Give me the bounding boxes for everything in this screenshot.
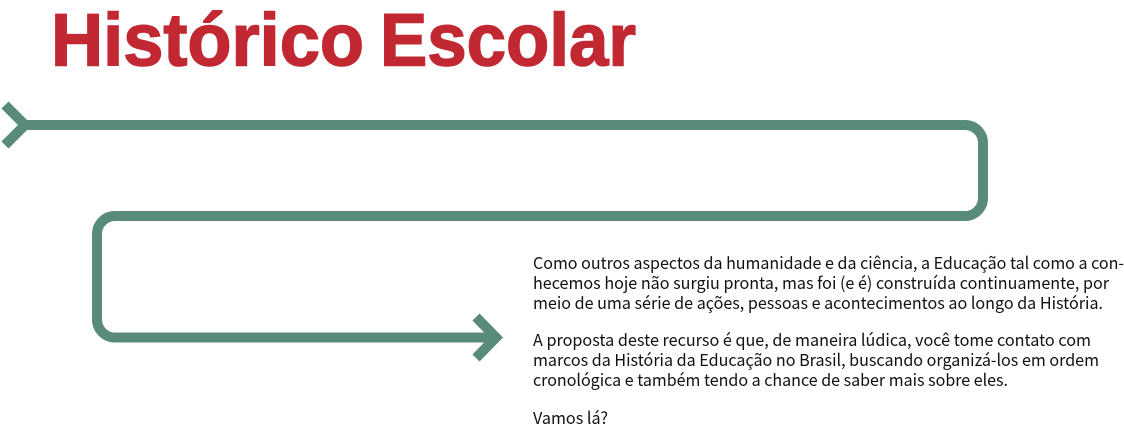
paragraph 1 (533, 250, 1124, 314)
title: Escolar (380, 0, 636, 82)
closing question: Vamos lá? (533, 405, 608, 429)
arrow start chevron (5, 105, 25, 145)
paragraph 1: hecemos hoje não surgiu pronta, mas foi (e é) construída continuamente, por (533, 270, 1110, 294)
title (51, 0, 636, 82)
serpentine arrow path (5, 105, 983, 358)
intro text block (533, 250, 1124, 429)
paragraph 1: meio de uma série de ações, pessoas e acontecimentos ao longo da História. (533, 290, 1103, 314)
arrow head (476, 317, 496, 358)
paragraph 2: A proposta deste recurso é que, de maneira lúdica, você tome contato com (533, 327, 1091, 351)
title: Histórico (51, 0, 364, 82)
paragraph 1: Como outros aspectos da humanidade e da ciência, a Educação tal como a con- (533, 250, 1124, 274)
paragraph 2: cronológica e também tendo a chance de saber mais sobre eles. (533, 367, 1008, 391)
serpentine line (25, 125, 983, 338)
paragraph 2: marcos da História da Educação no Brasil, buscando organizá-los em ordem (533, 347, 1099, 371)
paragraph 2 (533, 327, 1099, 391)
